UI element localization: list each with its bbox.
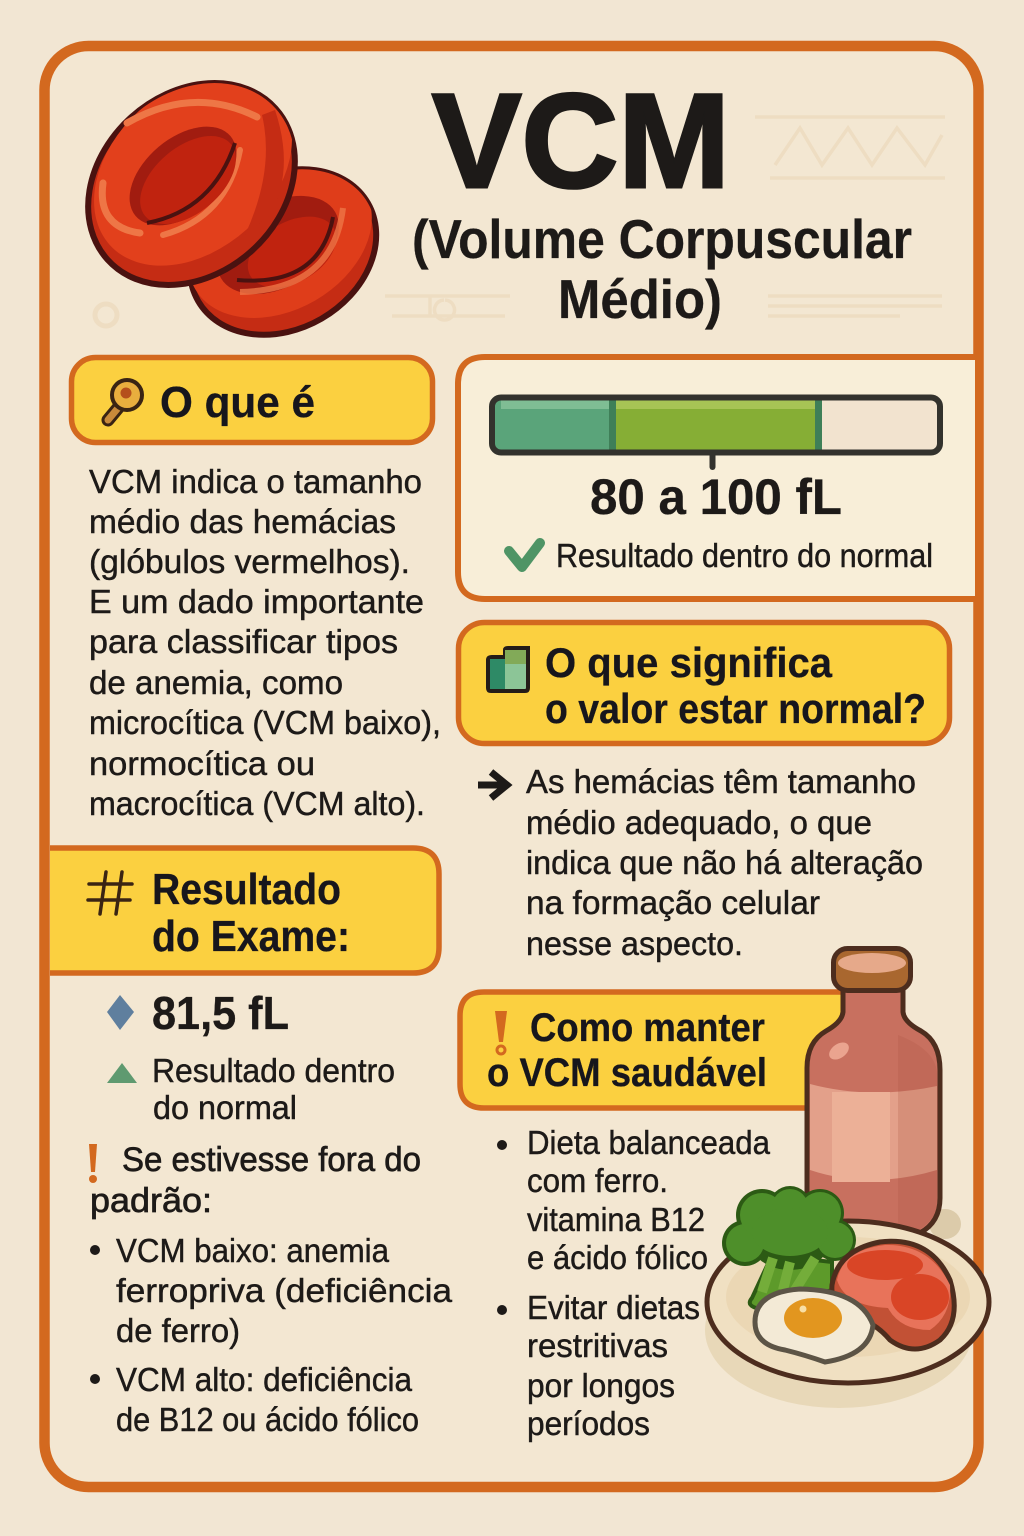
text block: definition: de anemia, como [89, 664, 343, 701]
text block: tips: Dieta balanceada [527, 1124, 771, 1161]
panel: normal range [458, 357, 975, 599]
text block: meaning: médio adequado, o que [526, 804, 872, 841]
heading: Resultado do Exame [50, 848, 439, 973]
text block: definition: normocítica ou [89, 745, 315, 782]
text block: out of range: de B12 ou ácido fólico [116, 1401, 419, 1438]
broccoli [722, 1186, 856, 1309]
upper red blood cell [85, 80, 298, 288]
text block: meaning: As hemácias têm tamanho [526, 763, 916, 800]
title: VCM: VCM [432, 67, 730, 216]
bottle [807, 948, 940, 1233]
heading: Resultado do Exame: Resultado [152, 865, 341, 914]
title: Médio) [558, 268, 722, 330]
plate [707, 1221, 989, 1383]
text block: out of range: VCM baixo: anemia [116, 1232, 390, 1269]
text block: out of range: VCM alto: deficiência [116, 1361, 413, 1398]
heading: O que significa: O que significa [545, 639, 833, 686]
illustration: bottle and plate [705, 948, 989, 1408]
text block: meaning: indica que não há alteração [526, 844, 923, 881]
text block: out of range [89, 1141, 453, 1438]
result value: 81,5 fL [152, 987, 289, 1039]
lower red blood cell [188, 166, 380, 338]
text block: tips: vitamina B12 [527, 1201, 705, 1238]
heading: Como manter [460, 992, 850, 1108]
icon: check mark [509, 543, 540, 567]
range value: 80 a 100 fL [590, 469, 842, 525]
bottle cap [834, 948, 910, 990]
text block: tips: restritivas [527, 1327, 668, 1364]
text block: out of range: padrão: [90, 1182, 212, 1220]
icon: green blocks [488, 648, 528, 691]
text block: definition: VCM indica o tamanho [89, 463, 422, 500]
text block: out of range: ferropriva (deficiência [116, 1272, 453, 1309]
text block: tips: e ácido fólico [527, 1239, 708, 1276]
plate shadow [705, 1252, 973, 1408]
icon: exclamation [495, 1011, 507, 1054]
heading: O que significa [458, 622, 950, 744]
rim highlights [102, 102, 257, 235]
central hollow [111, 107, 255, 245]
icon: diamond [107, 995, 134, 1030]
subtitle: (Volume Corpuscular [412, 208, 912, 270]
icon: triangle [107, 1063, 137, 1083]
text block: out of range: de ferro) [116, 1312, 240, 1349]
heading: O que significa: o valor estar normal? [545, 685, 926, 732]
text block: meaning: nesse aspecto. [526, 925, 743, 962]
text block: meaning: na formação celular [526, 884, 820, 921]
title [412, 67, 912, 330]
icon: exclamation [89, 1144, 97, 1183]
text block: definition: médio das hemácias [89, 503, 396, 540]
bottle shadow [929, 1209, 961, 1239]
text block: tips: períodos [527, 1405, 650, 1442]
result value: Resultado dentro [152, 1052, 395, 1089]
heading: Resultado do Exame: do Exame: [152, 912, 350, 961]
text block: meaning [478, 763, 923, 962]
text block: definition: E um dado importante [89, 583, 424, 620]
icon: magnifying glass [108, 380, 142, 420]
text block: out of range: Se estivesse fora do [122, 1141, 421, 1179]
text block: definition: microcítica (VCM baixo), [89, 704, 441, 741]
text block: definition: macrocítica (VCM alto). [89, 785, 425, 822]
text block: tips: Evitar dietas [527, 1289, 700, 1326]
illustration: red blood cells [85, 80, 380, 338]
heading: Como manter: Como manter [530, 1006, 765, 1050]
faint decorative glyphs [95, 117, 945, 326]
icon: hash [88, 872, 132, 914]
icon: arrow [478, 772, 507, 798]
text block: tips: por longos [527, 1367, 675, 1404]
text block: definition: para classificar tipos [89, 623, 398, 660]
heading: O que é [72, 358, 432, 442]
text block: definition: (glóbulos vermelhos). [89, 543, 410, 580]
heading: O que é: O que é [160, 378, 315, 427]
panel: normal range: Resultado dentro do normal [556, 537, 933, 574]
result value: do normal [153, 1089, 297, 1126]
range bar [492, 398, 940, 467]
text block: tips [497, 1124, 771, 1442]
result value [107, 987, 395, 1126]
steak [832, 1241, 954, 1349]
text block: definition [89, 463, 441, 822]
heading: Como manter: o VCM saudável [487, 1051, 767, 1095]
text block: tips: com ferro. [527, 1162, 668, 1199]
fried egg [755, 1289, 873, 1362]
